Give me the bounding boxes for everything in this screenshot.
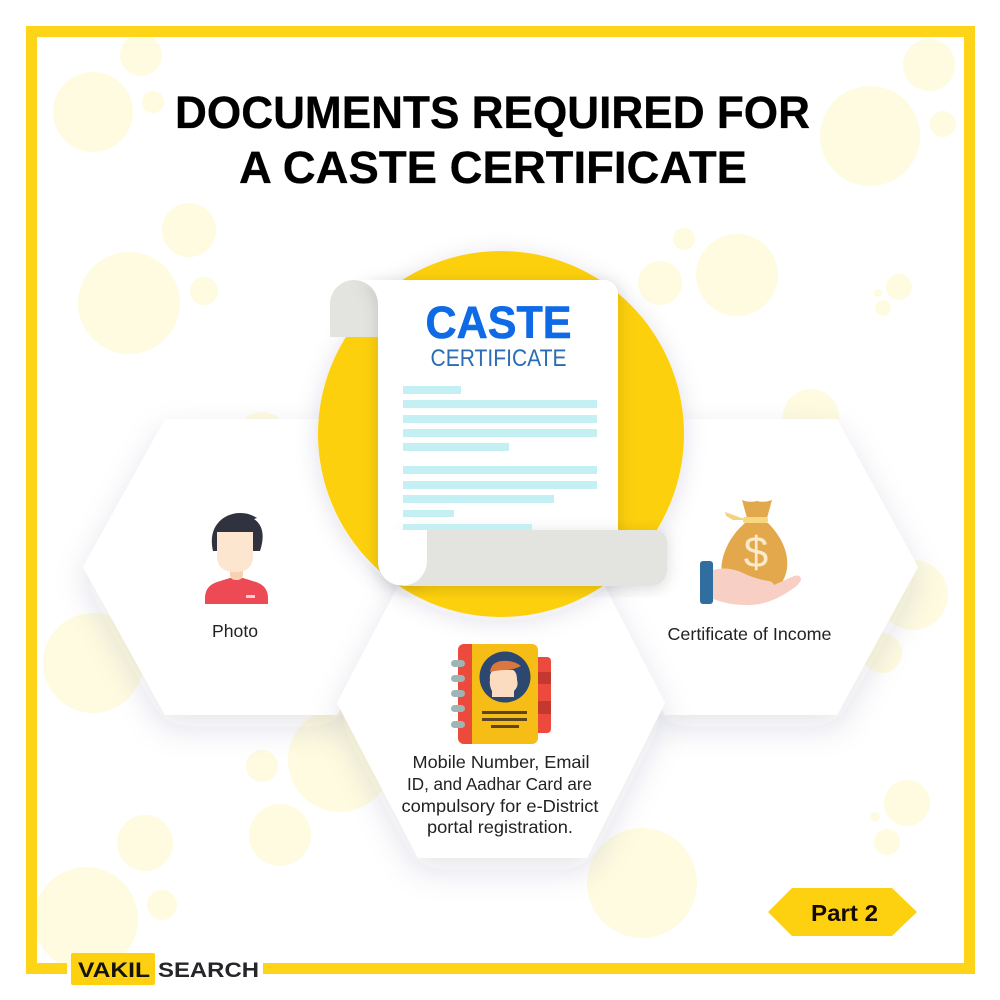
panel: mobile number hexagon bbox=[337, 548, 665, 858]
text lines bbox=[403, 386, 597, 530]
yellow circle backdrop bbox=[318, 251, 684, 617]
badge: part 2 bbox=[768, 888, 917, 936]
icon: address book bbox=[451, 644, 551, 744]
logo: vakil search bbox=[71, 953, 259, 985]
icon: money bag on hand: $ bbox=[744, 528, 768, 577]
top scroll roll bbox=[330, 280, 378, 337]
icon: money bag on hand bbox=[700, 500, 801, 605]
text: registration note: Mobile Number, Email bbox=[412, 752, 590, 772]
title: A CASTE CERTIFICATE bbox=[239, 142, 747, 193]
label: photo: Photo bbox=[212, 621, 258, 641]
heading: certificate: CERTIFICATE bbox=[430, 345, 566, 372]
icon: certificate scroll bbox=[330, 280, 667, 586]
text: registration note: ID, and Aadhar Card are bbox=[407, 774, 592, 794]
icon: person bbox=[205, 513, 268, 604]
paper flap bbox=[378, 530, 427, 586]
badge: part 2: Part 2 bbox=[811, 900, 878, 926]
title bbox=[175, 87, 810, 193]
title: DOCUMENTS REQUIRED FOR bbox=[175, 87, 810, 138]
text: registration note: compulsory for e-District bbox=[402, 796, 599, 816]
text: registration note: portal registration. bbox=[427, 817, 573, 837]
panel: photo hexagon bbox=[83, 419, 419, 715]
label: certificate of income: Certificate of Income bbox=[668, 624, 832, 644]
logo: vakil search: VAKIL bbox=[78, 959, 150, 982]
panel: income hexagon bbox=[582, 419, 918, 715]
paper sheet bbox=[354, 280, 618, 586]
logo: vakil search: SEARCH bbox=[158, 959, 259, 982]
heading: caste: CASTE bbox=[426, 297, 572, 348]
text: registration note bbox=[402, 752, 599, 837]
bottom scroll roll bbox=[403, 530, 667, 586]
